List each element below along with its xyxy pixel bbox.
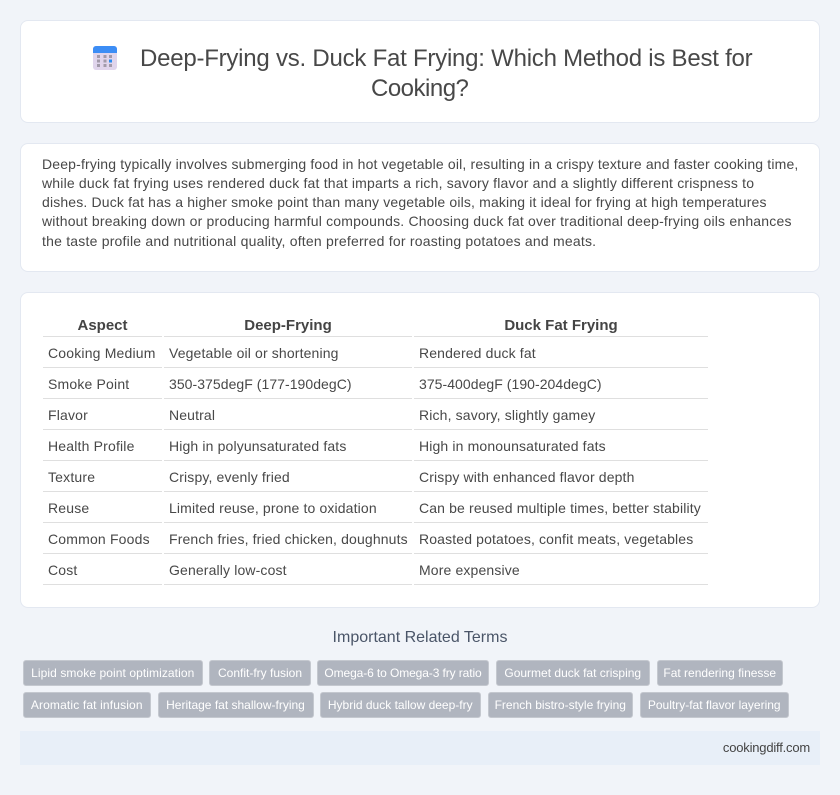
table header row: [77, 317, 618, 334]
related terms tags: [23, 660, 789, 718]
table header row: Deep-Frying: [244, 317, 332, 334]
table rows: Generally low-cost: [169, 562, 287, 578]
related terms tags: Poultry-fat flavor layering: [648, 698, 781, 712]
intro text panel: the taste profile and nutritional quality, often preferred for roasting potatoes and meats.: [42, 233, 596, 249]
table rows: Crispy with enhanced flavor depth: [419, 469, 635, 485]
related terms tags: Aromatic fat infusion: [31, 698, 143, 712]
title: [140, 45, 752, 102]
table rows: Smoke Point: [48, 376, 129, 392]
table header row: Aspect: [77, 317, 128, 334]
table rows: 350-375degF (177-190degC): [169, 376, 352, 392]
table rows: Texture: [48, 469, 95, 485]
intro text panel: dishes. Duck fat has a higher smoke point than many vegetable oils, making it ideal for frying at high temperatures: [42, 194, 767, 210]
table rows: Crispy, evenly fried: [169, 469, 290, 485]
related terms tags: Fat rendering finesse: [663, 666, 776, 680]
title: Cooking?: [371, 75, 468, 102]
table rows: Cooking Medium: [48, 345, 156, 361]
comparison table panel: [20, 292, 820, 608]
table rows: Neutral: [169, 407, 215, 423]
table rows: Limited reuse, prone to oxidation: [169, 500, 377, 516]
table rows: Rendered duck fat: [419, 345, 536, 361]
intro text panel: Deep-frying typically involves submerging food in hot vegetable oil, resulting in a crispy texture and faster cooking time,: [42, 156, 798, 172]
related terms tags: Omega-6 to Omega-3 fry ratio: [324, 666, 482, 680]
header card: [20, 20, 820, 123]
related terms tags: Gourmet duck fat crisping: [504, 666, 641, 680]
table rows: Cost: [48, 562, 78, 578]
intro text panel: while duck fat frying uses rendered duck fat that imparts a rich, savory flavor and a slightly different crispness to: [42, 175, 754, 191]
table rows: Health Profile: [48, 438, 135, 454]
footer domain: cookingdiff.com: [723, 740, 810, 755]
table header row: Duck Fat Frying: [504, 317, 618, 334]
table rows: Common Foods: [48, 531, 150, 547]
table rows: High in polyunsaturated fats: [169, 438, 346, 454]
table rows: [48, 345, 701, 578]
table rows: Rich, savory, slightly gamey: [419, 407, 595, 423]
table rows: Reuse: [48, 500, 89, 516]
table rows: Vegetable oil or shortening: [169, 345, 339, 361]
table rows: High in monounsaturated fats: [419, 438, 606, 454]
related terms tags: Lipid smoke point optimization: [31, 666, 194, 680]
related terms tags: Heritage fat shallow-frying: [166, 698, 305, 712]
icon: calendar: [93, 46, 117, 70]
table rows: French fries, fried chicken, doughnuts: [169, 531, 408, 547]
title: Deep-Frying vs. Duck Fat Frying: Which Method is Best for: [140, 45, 752, 72]
intro text panel: [20, 143, 820, 272]
related terms tags: Confit-fry fusion: [218, 666, 302, 680]
table rows: Flavor: [48, 407, 88, 423]
table rows: Roasted potatoes, confit meats, vegetables: [419, 531, 693, 547]
table rows: More expensive: [419, 562, 520, 578]
table rows: 375-400degF (190-204degC): [419, 376, 602, 392]
related terms heading: Important Related Terms: [333, 629, 507, 646]
related terms tags: Hybrid duck tallow deep-fry: [328, 698, 473, 712]
footer bar: [20, 731, 820, 765]
related terms tags: French bistro-style frying: [495, 698, 626, 712]
table rows: Can be reused multiple times, better stability: [419, 500, 701, 516]
intro text panel: without breaking down or producing harmful compounds. Choosing duck fat over traditional deep-frying oils enhances: [42, 213, 792, 229]
